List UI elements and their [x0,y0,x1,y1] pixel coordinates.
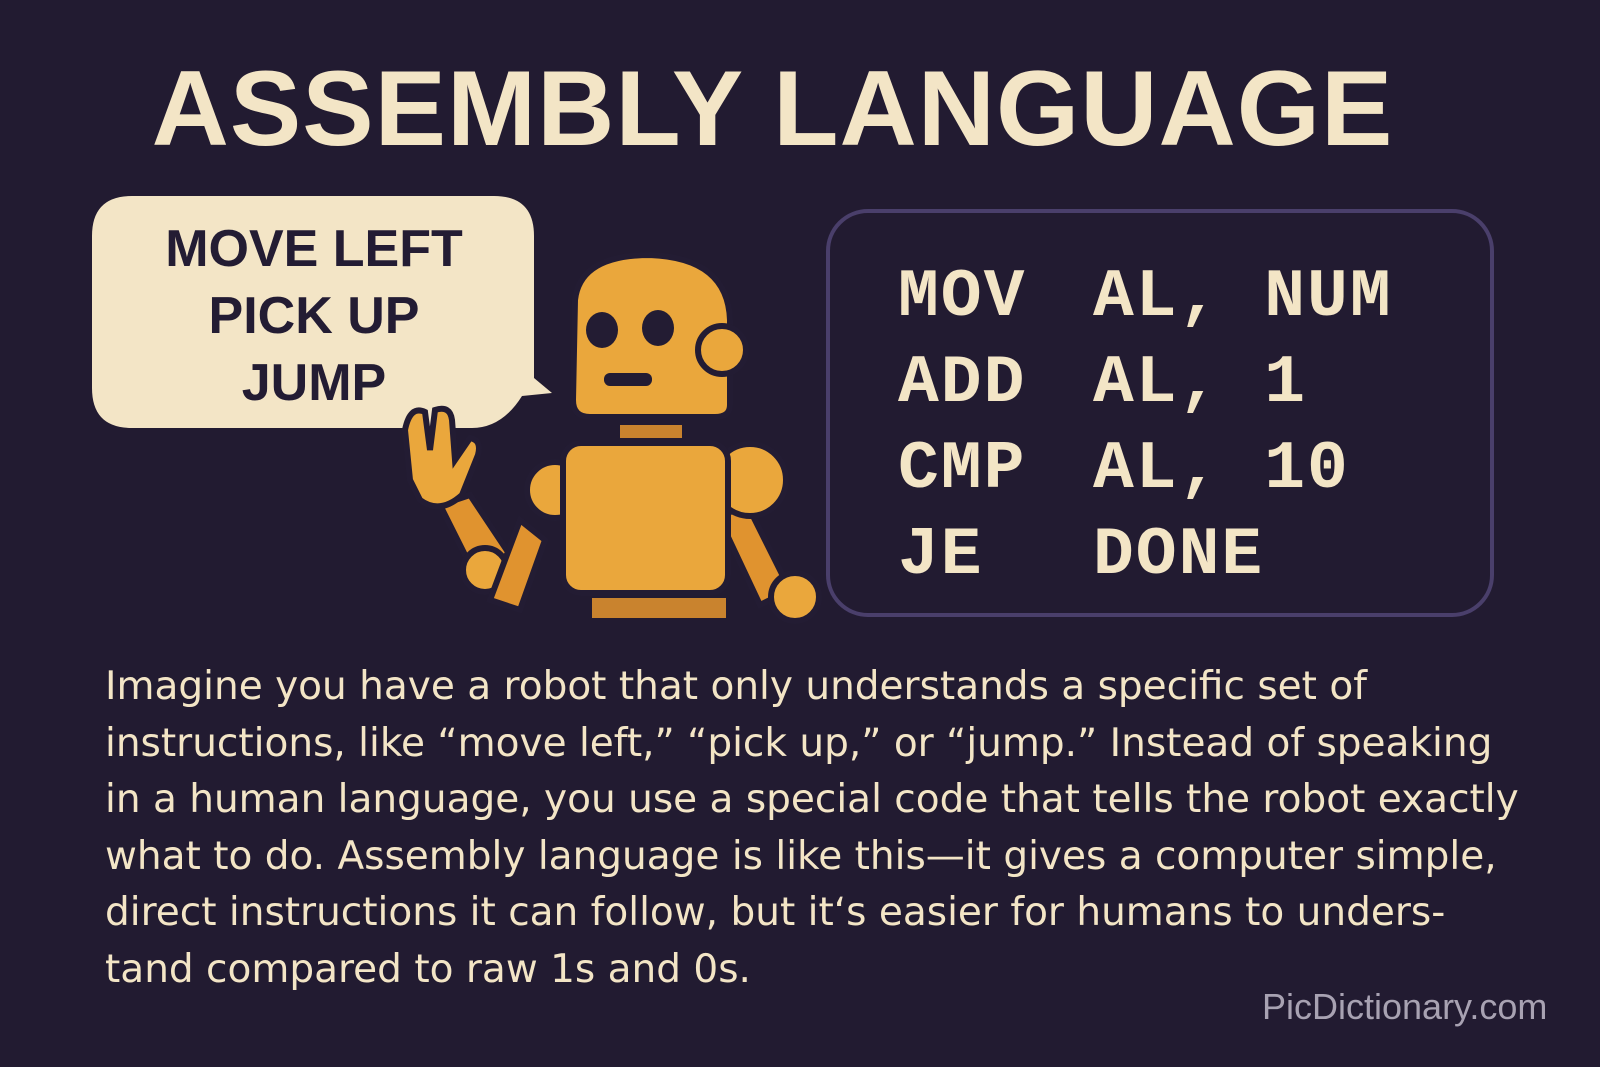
code lines: JE [898,517,984,594]
description paragraph: tand compared to raw 1s and 0s. [105,946,751,992]
torso [563,443,728,593]
code box: AL, 10 [1093,431,1350,508]
description paragraph: Imagine you have a robot that only understands a specific set of [105,664,1367,709]
right arm [720,500,790,605]
footer brand: PicDictionary.com [1262,986,1547,1027]
code box [826,209,1494,617]
code lines: CMP [898,431,1026,508]
code box: AL, NUM [1093,259,1393,336]
robot illustration [402,258,816,618]
bubble text: PICK UP [209,287,419,345]
left arm [440,495,510,565]
description paragraph: direct instructions it can follow, but it‘s easier for humans to unders- [105,890,1445,935]
code lines: MOV [898,259,1026,336]
code lines [898,259,1026,594]
code lines: ADD [898,345,1026,422]
bubble text: JUMP [242,354,386,412]
description paragraph: in a human language, you use a special code that tells the robot exactly [105,777,1519,822]
head [573,255,730,417]
description paragraph: what to do. Assembly language is like this—it gives a computer simple, [105,834,1497,878]
description paragraph: instructions, like “move left,” “pick up,” or “jump.” Instead of speaking [105,720,1492,766]
bubble text [165,220,463,412]
speech bubble [92,196,552,428]
description paragraph [105,664,1519,992]
bubble text: MOVE LEFT [165,220,463,278]
code box: DONE [1093,517,1264,594]
title: ASSEMBLY LANGUAGE [152,48,1393,168]
code box: AL, 1 [1093,345,1307,422]
